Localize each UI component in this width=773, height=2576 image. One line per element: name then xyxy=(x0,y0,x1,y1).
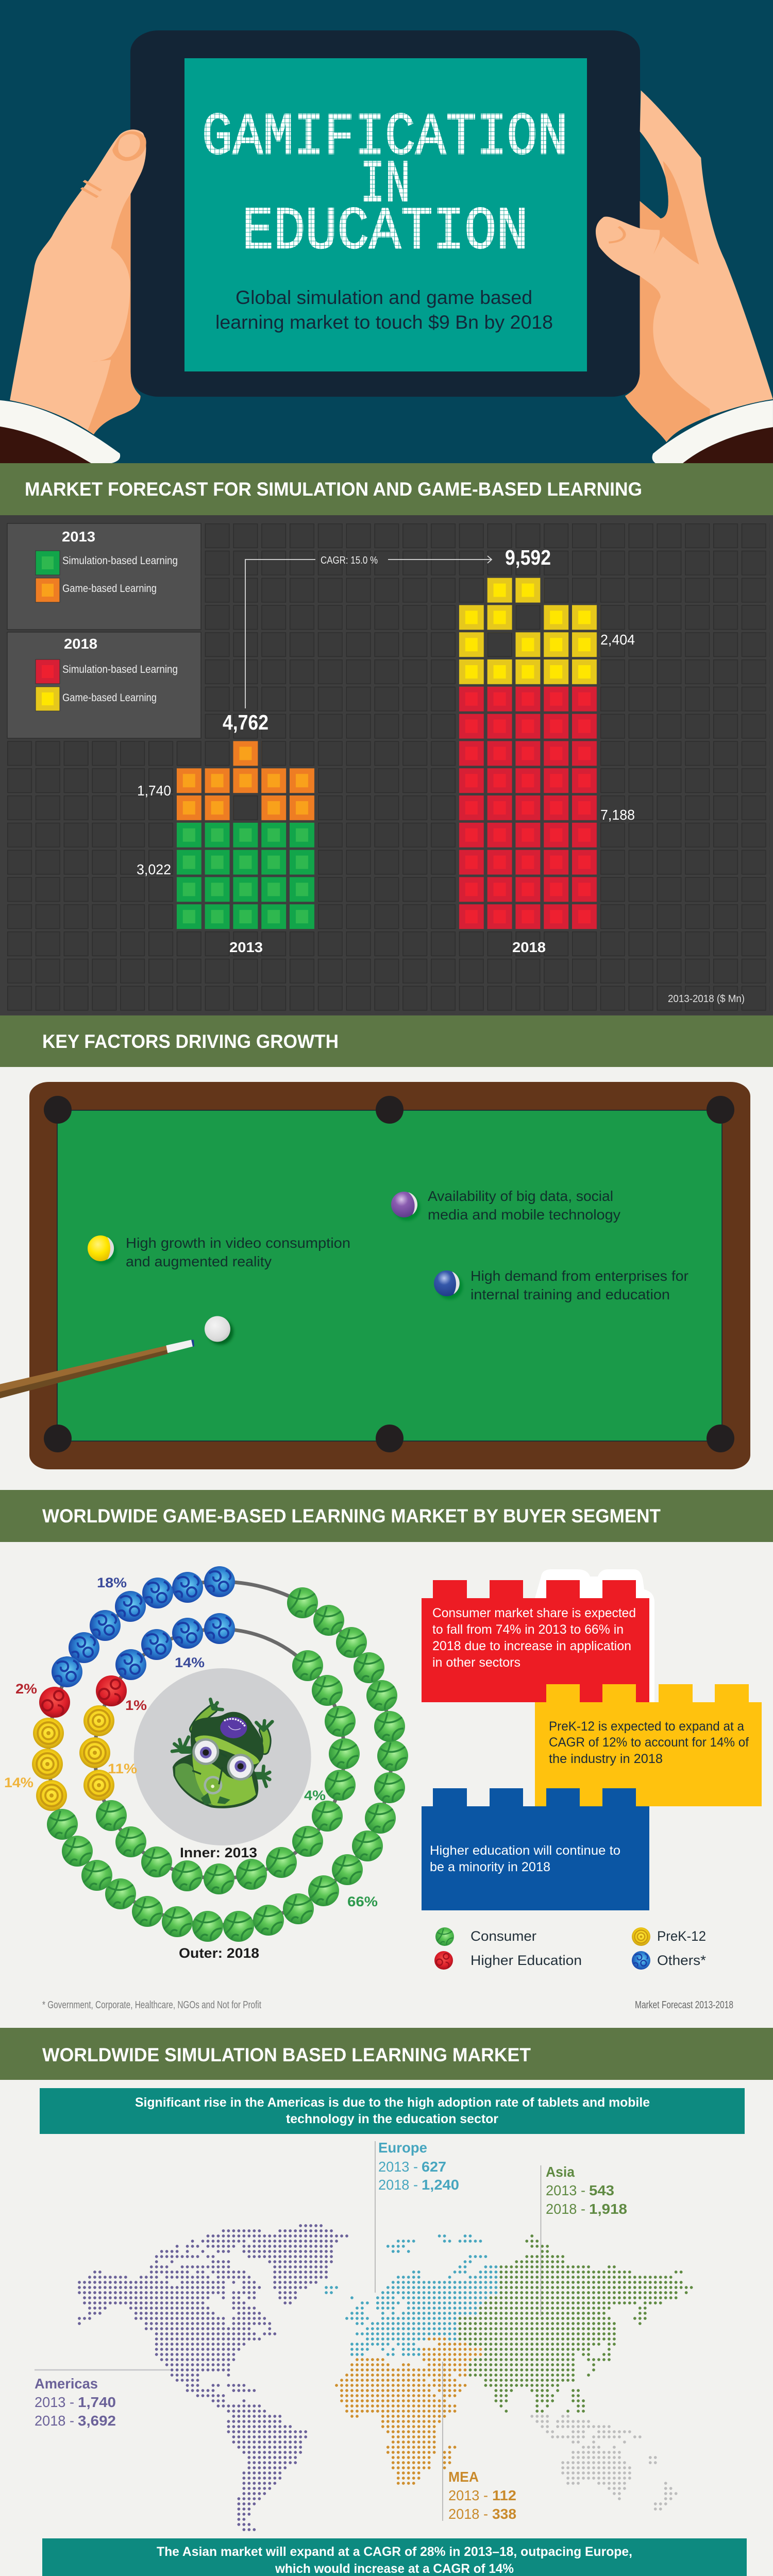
section band: simulation market: WORLDWIDE SIMULATION BASED LEARNING MARKET xyxy=(42,2044,531,2065)
outer beads 2018 xyxy=(32,1566,408,1942)
blue brick xyxy=(422,1788,649,1910)
red brick: to fall from 74% in 2013 to 66% in xyxy=(432,1622,624,1637)
legend 2018: Game-based Learning xyxy=(62,692,157,704)
lego bricks callouts xyxy=(422,1569,762,1910)
callout: asian market: The Asian market will expand at a CAGR of 28% in 2013–18, outpacing Europe, xyxy=(157,2545,632,2559)
callout: asian market xyxy=(42,2538,747,2576)
factor text 3: High demand from enterprises for xyxy=(470,1268,688,1284)
legend 2018 xyxy=(7,632,201,738)
section band: key factors: KEY FACTORS DRIVING GROWTH xyxy=(42,1031,339,1052)
map callouts: simulation xyxy=(35,2140,627,2522)
legend 2013 xyxy=(7,523,201,630)
callout: americas: 1,740 xyxy=(78,2394,116,2410)
callout: europe xyxy=(375,2140,459,2293)
callout: mea: 2013 - xyxy=(448,2487,488,2503)
dotted world map: simulation xyxy=(79,2226,692,2530)
legend 2018: 2018 xyxy=(64,636,97,652)
section band: market forecast: MARKET FORECAST FOR SIMULATION AND GAME-BASED LEARNING xyxy=(25,479,642,500)
title: GAMIFICATION xyxy=(202,104,568,172)
percentage labels: 14% xyxy=(175,1655,205,1670)
chart values: 9,592 xyxy=(505,546,551,569)
callout: asia: Asia xyxy=(546,2164,575,2180)
pockets xyxy=(44,1096,734,1452)
panel: market forecast grid chart xyxy=(0,515,773,1015)
percentage labels: Inner: 2013 xyxy=(180,1845,257,1860)
cue stick xyxy=(0,1340,194,1398)
segment legend xyxy=(434,1927,706,1970)
callout: americas: Americas xyxy=(35,2376,98,2392)
yellow brick: CAGR of 12% to account for 14% of xyxy=(549,1735,749,1750)
legend 2013: 2013 xyxy=(62,529,95,545)
callout: mea: 338 xyxy=(492,2506,516,2522)
callout: americas rise xyxy=(40,2088,745,2134)
segment footnotes: * Government, Corporate, Healthcare, NGOs and Not for Profit xyxy=(42,1999,261,2011)
factor text 1 xyxy=(126,1235,350,1269)
hero panel xyxy=(0,0,773,463)
factor text 2: media and mobile technology xyxy=(428,1207,620,1223)
chart values xyxy=(137,546,635,955)
factor text 3 xyxy=(470,1268,688,1302)
segment legend: Others* xyxy=(657,1953,706,1968)
CAGR arrow: CAGR: 15.0 % xyxy=(321,555,378,566)
section band: market forecast xyxy=(0,463,773,515)
frog character xyxy=(172,1699,272,1808)
yellow brick: PreK-12 is expected to expand at a xyxy=(549,1719,744,1734)
CAGR arrow xyxy=(245,555,492,708)
callout: asia: 543 xyxy=(589,2182,614,2198)
unit note: 2013-2018 ($ Mn) xyxy=(668,993,745,1005)
chart values: 2013 xyxy=(229,939,263,955)
callout: americas rise: technology in the education sector xyxy=(286,2112,498,2126)
yellow brick xyxy=(535,1684,762,1806)
title: IN xyxy=(360,151,411,219)
factor text 2: Availability of big data, social xyxy=(428,1188,613,1204)
chart values: 7,188 xyxy=(600,807,635,823)
segment legend: PreK-12 xyxy=(657,1928,706,1944)
red brick: Consumer market share is expected xyxy=(432,1606,636,1620)
callout: mea: 112 xyxy=(492,2487,516,2503)
callout: mea xyxy=(443,2362,516,2522)
chart values: 1,740 xyxy=(137,783,171,799)
bar 2018 xyxy=(459,578,600,931)
ball: yellow xyxy=(88,1235,116,1264)
segment footnotes: Market Forecast 2013-2018 xyxy=(635,1999,733,2011)
callout: asia: 2013 - xyxy=(546,2182,585,2198)
blue brick: be a minority in 2018 xyxy=(430,1860,550,1874)
chart values: 4,762 xyxy=(223,710,268,734)
callout: americas: 2018 - xyxy=(35,2413,74,2429)
callout: americas: 3,692 xyxy=(78,2413,116,2429)
segment legend: Consumer xyxy=(470,1928,536,1944)
cue ball xyxy=(205,1316,233,1345)
yellow brick: the industry in 2018 xyxy=(549,1752,663,1766)
section band: buyer segment xyxy=(0,1490,773,1542)
percentage labels: 4% xyxy=(304,1788,326,1803)
segment legend: Higher Education xyxy=(470,1953,582,1968)
percentage labels: 14% xyxy=(4,1775,33,1790)
chart values: 2018 xyxy=(512,939,546,955)
factor text 1: and augmented reality xyxy=(126,1253,272,1269)
inner beads 2013 xyxy=(79,1613,360,1894)
callout: asia xyxy=(541,2164,627,2316)
tablet with title screen xyxy=(130,30,640,397)
subtitle: learning market to touch $9 Bn by 2018 xyxy=(215,312,553,333)
red brick xyxy=(422,1580,649,1702)
callout: asia: 2018 - xyxy=(546,2201,585,2217)
right hand xyxy=(596,90,773,463)
callout: americas rise: Significant rise in the Americas is due to the high adoption rate of tablets and mobile xyxy=(135,2095,650,2110)
factor text 1: High growth in video consumption xyxy=(126,1235,350,1251)
subtitle: Global simulation and game based xyxy=(236,287,532,308)
title: EDUCATION xyxy=(242,198,528,266)
percentage labels: 66% xyxy=(347,1894,378,1909)
panel: bead ring chart xyxy=(4,1566,408,1961)
subtitle xyxy=(215,287,553,333)
ring strings xyxy=(48,1582,392,1925)
legend 2013: Simulation-based Learning xyxy=(62,555,178,567)
legend 2018: Simulation-based Learning xyxy=(62,664,178,675)
factor text 3: internal training and education xyxy=(470,1286,670,1302)
section band: key factors xyxy=(0,1015,773,1067)
callout: europe: Europe xyxy=(378,2140,427,2156)
ball: blue xyxy=(434,1270,463,1299)
section band: buyer segment: WORLDWIDE GAME-BASED LEARNING MARKET BY BUYER SEGMENT xyxy=(42,1505,661,1527)
section band: simulation market xyxy=(0,2028,773,2080)
callout: mea: 2018 - xyxy=(448,2506,488,2522)
percentage labels: 11% xyxy=(108,1761,137,1776)
callout: mea: MEA xyxy=(448,2469,479,2485)
chart values: 2,404 xyxy=(600,632,635,648)
percentage labels: 1% xyxy=(125,1698,147,1713)
blue brick: Higher education will continue to xyxy=(430,1843,620,1858)
percentage labels: 18% xyxy=(97,1575,127,1590)
percentage labels xyxy=(4,1575,378,1961)
bar 2013 xyxy=(177,741,318,931)
callout: asia: 1,918 xyxy=(589,2201,627,2217)
callout: asian market: which would increase at a CAGR of 14% xyxy=(275,2562,514,2576)
factor text 2 xyxy=(428,1188,620,1223)
callout: europe: 2013 - xyxy=(378,2159,418,2175)
callout: europe: 1,240 xyxy=(422,2177,459,2193)
percentage labels: Outer: 2018 xyxy=(179,1945,259,1961)
left hand xyxy=(0,129,146,463)
callout: americas xyxy=(35,2370,170,2429)
panel: billiard table xyxy=(0,1082,750,1469)
red brick: in other sectors xyxy=(432,1655,520,1670)
segment footnotes xyxy=(42,1999,733,2011)
red brick: 2018 due to increase in application xyxy=(432,1639,631,1653)
percentage labels: 2% xyxy=(15,1681,37,1697)
callout: americas: 2013 - xyxy=(35,2394,74,2410)
center disc xyxy=(134,1668,311,1845)
ball: purple xyxy=(391,1192,420,1221)
chart values: 3,022 xyxy=(137,861,171,877)
title xyxy=(196,104,575,266)
callout: europe: 2018 - xyxy=(378,2177,418,2193)
legend 2013: Game-based Learning xyxy=(62,583,157,595)
callout: europe: 627 xyxy=(422,2159,446,2175)
